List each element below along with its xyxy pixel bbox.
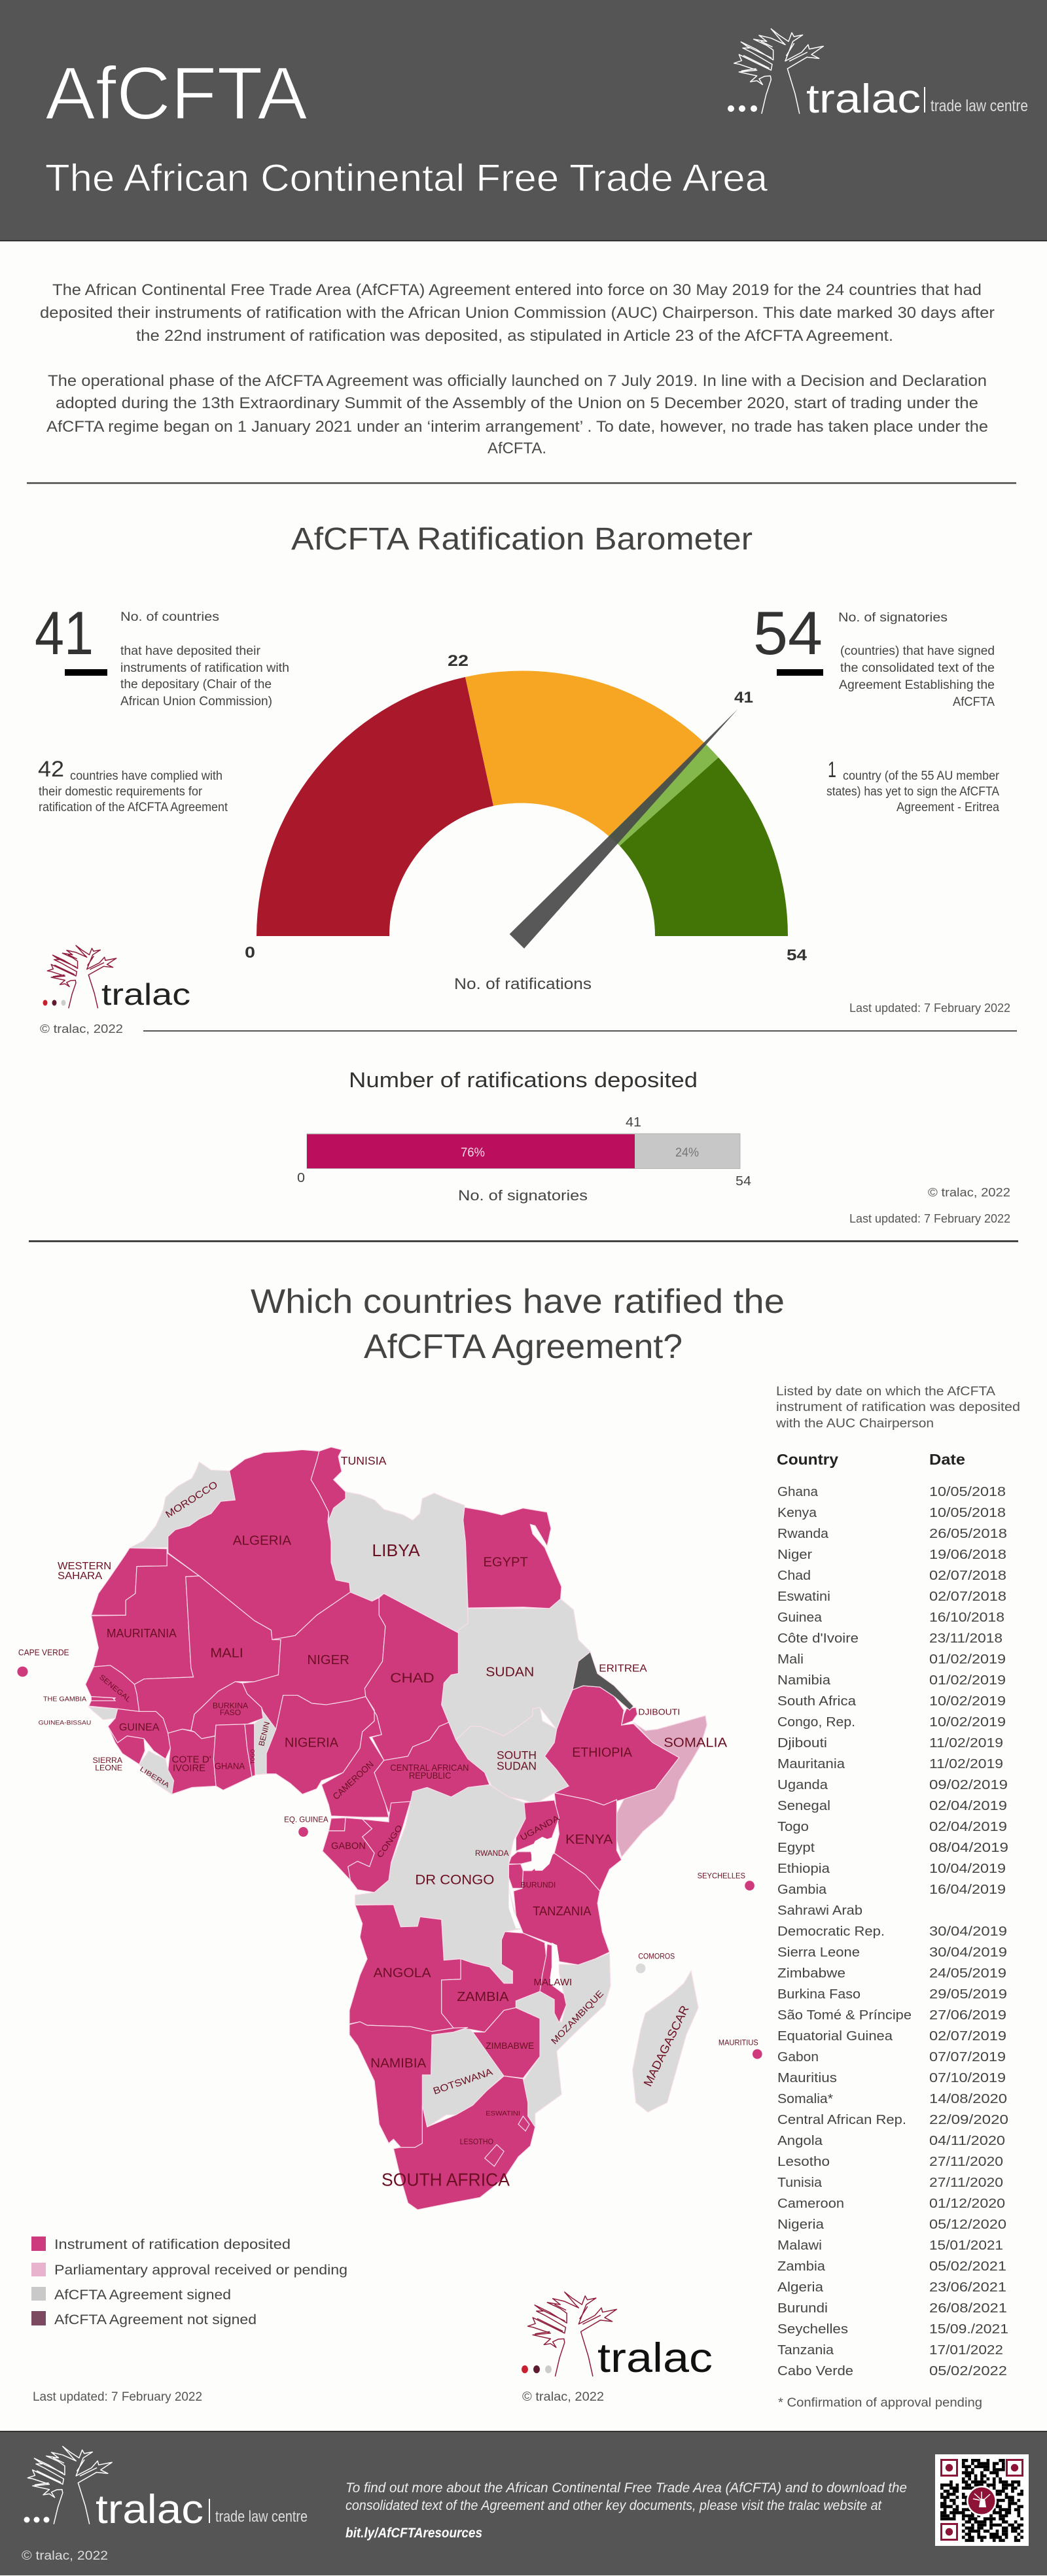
ratification table: 27/11/2020 [929,2155,1003,2169]
map country labels: LESOTHO [460,2138,493,2146]
map rotated labels: MOROCCO [164,1479,220,1520]
ratification table: Congo, Rep. [777,1715,855,1730]
ratification table: Ghana [777,1485,819,1499]
ratification table: 23/11/2018 [929,1631,1003,1646]
ratification table: 05/12/2020 [929,2218,1006,2232]
ratification table: Sahrawi Arab [777,1904,862,1918]
ratification table: Zambia [777,2259,826,2274]
ratification table: Seychelles [777,2322,848,2337]
gauge needle [510,709,738,949]
logo: tralac header: trade law centre [931,97,1028,115]
map country labels: KENYA [565,1832,613,1847]
map country labels: BURUNDI [521,1881,556,1889]
ratification table: 05/02/2021 [929,2259,1006,2274]
map rotated labels: SENEGAL [98,1673,132,1704]
ratification table: 15/09./2021 [929,2322,1008,2337]
map country labels: LEONE [95,1764,122,1772]
map country labels: GUINEA-BISSAU [39,1719,91,1726]
ratification table: Niger [777,1548,812,1562]
map rotated labels: CAMEROON [330,1759,376,1801]
gauge labels: 22 [448,652,469,670]
map country labels: CHAD [390,1670,435,1686]
ratification table: 26/08/2021 [929,2301,1007,2316]
intro text [40,281,995,457]
ratification table: 22/09/2020 [929,2113,1008,2127]
last updated: barometer: Last updated: 7 February 2022 [849,1001,1010,1015]
heading: barometer: AfCFTA Ratification Barometer [291,522,753,557]
ratification table: 16/10/2018 [929,1610,1004,1625]
table intro note: Listed by date on which the AfCFTA [776,1385,995,1399]
footer band [0,2431,1047,2575]
map country labels: ERITREA [599,1663,647,1674]
ratification table: Uganda [777,1778,828,1792]
countries: parliamentary approval [616,1716,707,1857]
heading: ratifications deposited: Number of ratifications deposited [349,1068,698,1092]
intro text: The operational phase of the AfCFTA Agreement was officially launched on 7 July 2019. In line with a Decision and Declaration [48,372,987,390]
map country labels: COMOROS [638,1952,675,1960]
map country labels: MALAWI [534,1977,572,1987]
ratification table: 14/08/2020 [929,2092,1007,2106]
map country labels: DR CONGO [415,1871,494,1887]
copyright: footer: © tralac, 2022 [22,2549,108,2563]
table header: Date [929,1451,965,1468]
ratification table: 19/06/2018 [929,1548,1006,1562]
map country labels: FASO [220,1708,241,1717]
map country labels: IVOIRE [173,1762,205,1773]
ratification table: 10/05/2018 [929,1485,1006,1499]
stat: 41 countries: No. of countries [120,610,219,624]
ratification table: Togo [777,1820,809,1834]
progress bar: 41 [626,1115,641,1130]
map country labels: SOMALIA [664,1735,727,1750]
table intro note: with the AUC Chairperson [775,1417,934,1431]
ratification table: 07/10/2019 [929,2071,1006,2085]
ratification table: 11/02/2019 [929,1757,1003,1771]
map rotated labels: CONGO [375,1823,404,1860]
intro text: AfCFTA regime began on 1 January 2021 under an ‘interim arrangement’ . To date, however, no trade has taken place under the [46,418,988,436]
map legend: AfCFTA Agreement not signed [54,2312,257,2327]
copyright: map: © tralac, 2022 [522,2390,604,2404]
ratification table: Algeria [777,2280,824,2295]
map rotated labels: BENIN [257,1720,272,1747]
progress bar: 0 [297,1171,305,1185]
ratification table: 02/07/2019 [929,2029,1006,2044]
logo: tralac map [522,2292,713,2381]
map legend [31,2237,347,2327]
ratification table: 10/05/2018 [929,1506,1006,1520]
logo: tralac barometer [43,945,190,1011]
last updated: map: Last updated: 7 February 2022 [33,2390,202,2404]
ratification table: 24/05/2019 [929,1966,1006,1981]
heading: which countries: Which countries have ratified the [251,1283,785,1321]
ratification table: Mauritius [777,2071,837,2085]
map country labels: TANZANIA [533,1904,592,1918]
table header: Country [777,1451,838,1468]
map country labels: CAPE VERDE [18,1648,69,1657]
map country labels: LIBYA [372,1541,420,1559]
stat: 1 country not signed: 1 [828,757,836,782]
map country labels: MAURITIUS [719,2038,758,2047]
stat: 54 signatories: Agreement Establishing the [839,678,995,692]
map country labels [18,1455,758,2190]
ratification table: 09/02/2019 [929,1778,1008,1792]
copyright: bar chart: © tralac, 2022 [928,1186,1010,1199]
ratification table: 29/05/2019 [929,1987,1007,2002]
map country labels: GHANA [215,1762,245,1771]
map legend: Parliamentary approval received or pending [54,2263,347,2278]
ratification table: 10/02/2019 [929,1694,1006,1709]
ratification table: 07/07/2019 [929,2050,1006,2064]
map of Africa [17,1447,762,2210]
ratification table: Cabo Verde [777,2364,853,2378]
ratification table: Ethiopia [777,1862,830,1876]
QR code [935,2454,1029,2546]
ratification table: Gabon [777,2050,819,2064]
ratification table: Equatorial Guinea [777,2029,893,2044]
intro text: adopted during the 13th Extraordinary Summit of the Assembly of the Union on 5 December 2020, start of trading under the [56,394,978,412]
ratification table: Sierra Leone [777,1945,860,1960]
table header [777,1451,965,1468]
ratification table: Gambia [777,1883,827,1897]
map country labels: SOUTH [497,1749,537,1762]
logo: tralac header: tralac [806,77,921,122]
map country labels: CENTRAL AFRICAN [390,1763,469,1773]
map country labels: ESWATINI [486,2110,520,2117]
ratification table: 04/11/2020 [929,2134,1005,2148]
ratification table: 23/06/2021 [929,2280,1006,2295]
map rotated labels: BOTSWANA [432,2066,494,2097]
ratification table: Rwanda [777,1527,829,1541]
ratification table: 05/02/2022 [929,2364,1007,2378]
map country labels: REPUBLIC [409,1771,451,1781]
map country labels: NIGER [307,1652,349,1667]
ratification table: 08/04/2019 [929,1841,1008,1855]
map rotated labels: MOZAMBIQUE [549,1988,605,2046]
ratification table: 17/01/2022 [929,2343,1003,2358]
ratification table: 02/04/2019 [929,1799,1007,1813]
gauge labels: 0 [245,944,255,962]
progress bar: 54 [736,1174,751,1189]
map rotated labels: TOGO [250,1749,256,1764]
footer text: bit.ly/AfCFTAresources [346,2526,482,2541]
footer text: To find out more about the African Continental Free Trade Area (AfCFTA) and to download the [346,2480,907,2496]
ratification table: Guinea [777,1610,823,1625]
stat: 54 signatories: (countries) that have signed [840,644,995,658]
stat: 42 countries complied [38,757,228,814]
logo: tralac header [728,29,1028,122]
footnote: * Confirmation of approval pending [778,2396,982,2410]
ratification table: Democratic Rep. [777,1924,885,1939]
map country labels: ALGERIA [233,1533,291,1548]
ratification table: 15/01/2021 [929,2238,1003,2253]
table intro note: instrument of ratification was deposited [776,1401,1020,1414]
stat: 41 countries: the depositary (Chair of the [120,678,272,691]
progress bar: 24% [675,1146,699,1160]
ratification table: Chad [777,1569,811,1583]
progress bar: No. of signatories [458,1187,588,1204]
ratification table: 10/02/2019 [929,1715,1006,1730]
map legend: Instrument of ratification deposited [54,2237,291,2252]
heading: which countries: AfCFTA Agreement? [364,1328,683,1366]
ratification table: Somalia* [777,2092,833,2106]
map country labels: GABON [331,1840,366,1851]
intro text: AfCFTA. [488,440,546,457]
ratification table: 02/07/2018 [929,1569,1006,1583]
map country labels: ANGOLA [374,1966,431,1981]
stat: 54 signatories: AfCFTA [953,695,995,709]
stat: 1 country not signed [826,757,1000,814]
map rotated labels: UGANDA [518,1813,561,1843]
logo: tralac footer: tralac [96,2487,204,2532]
ratification table: 11/02/2019 [929,1736,1003,1750]
intro text: the 22nd instrument of ratification was deposited, as stipulated in Article 23 of the AfCFTA Agreement. [136,327,893,345]
ratification table: Eswatini [777,1590,830,1604]
ratification table: Central African Rep. [777,2113,906,2127]
countries: AfCFTA signed [89,1462,698,2127]
map country labels: SIERRA [93,1756,123,1765]
copyright: barometer: © tralac, 2022 [40,1022,123,1036]
subtitle: The African Continental Free Trade Area [45,157,768,200]
stat: 41 countries: 41 [35,599,94,667]
map country labels: RWANDA [475,1849,509,1858]
map rotated labels: MADAGASCAR [641,2004,692,2089]
ratification table: Malawi [777,2238,822,2253]
ratification table [777,1451,1008,2378]
ratification table: 02/04/2019 [929,1820,1007,1834]
progress bar [297,1115,751,1204]
ratification table: Cameroon [777,2197,844,2211]
stat: 1 country not signed: country (of the 55 AU member [843,769,1000,783]
gauge labels [245,652,807,964]
ratification table: 10/04/2019 [929,1862,1006,1876]
stat: 41 countries: that have deposited their [120,644,261,658]
ratification table: Zimbabwe [777,1966,845,1981]
ratification table: 26/05/2018 [929,1527,1007,1541]
map country labels: SOUTH AFRICA [382,2170,510,2190]
last updated: bar chart: Last updated: 7 February 2022 [849,1212,1010,1225]
stat: 1 country not signed: Agreement - Eritrea [896,801,999,814]
ratification table: 30/04/2019 [929,1945,1007,1960]
stat: 54 signatories: No. of signatories [838,611,948,625]
map country labels: MALI [210,1646,243,1660]
map rotated labels [98,1479,692,2097]
stat: 42 countries complied: ratification of the AfCFTA Agreement [39,801,228,814]
map country labels: SUDAN [497,1760,537,1773]
map country labels: NAMIBIA [370,2055,426,2070]
intro text: deposited their instruments of ratification with the African Union Commission (AUC) Chairperson. This date marked 30 days after [40,304,995,322]
map country labels: ETHIOPIA [572,1745,632,1760]
map country labels: SEYCHELLES [698,1871,745,1880]
ratification table: Namibia [777,1673,831,1688]
countries: ratified [17,1447,762,2210]
ratification table: Nigeria [777,2218,825,2232]
gauge chart: No. of ratifications [454,975,592,993]
map country labels: THE GAMBIA [43,1696,86,1703]
ratification table: 27/11/2020 [929,2176,1003,2190]
ratification table: Burkina Faso [777,1987,861,2002]
ratification table: Kenya [777,1506,817,1520]
map country labels: SAHARA [58,1570,103,1582]
ratification table: Mauritania [777,1757,845,1771]
gauge labels: 41 [734,689,753,706]
ratification table: Senegal [777,1799,830,1813]
gauge labels: 54 [787,947,807,964]
map country labels: SUDAN [486,1664,534,1679]
map country labels: MAURITANIA [107,1627,177,1640]
stat: 54 signatories: the consolidated text of the [840,661,995,675]
header band [0,0,1047,241]
title: AfCFTA [45,52,308,135]
map country labels: NIGERIA [285,1735,338,1750]
ratification table: 01/02/2019 [929,1652,1006,1667]
logo: tralac map: tralac [597,2335,713,2381]
map country labels: GUINEA [119,1722,160,1733]
map country labels: EGYPT [484,1555,528,1569]
map country labels: BURKINA [213,1701,249,1710]
footer text: consolidated text of the Agreement and other key documents, please visit the tralac website at [346,2498,882,2513]
ratification table: 27/06/2019 [929,2008,1006,2023]
ratification table: Djibouti [777,1736,827,1750]
stat: 42 countries complied: countries have complied with [70,769,222,783]
ratification table: Mali [777,1652,804,1667]
ratification table: 02/07/2018 [929,1590,1006,1604]
ratification table: Côte d'Ivoire [777,1631,859,1646]
ratification table: Egypt [777,1841,815,1855]
footer text [346,2480,907,2541]
map country labels: DJIBOUTI [638,1707,680,1717]
ratification table: Lesotho [777,2155,830,2169]
map country labels: WESTERN [58,1560,111,1571]
intro text: The African Continental Free Trade Area (AfCFTA) Agreement entered into force on 30 May 2019 for the 24 countries that had [52,281,982,299]
map country labels: EQ. GUINEA [284,1815,328,1824]
stat: 1 country not signed: states) has yet to sign the AfCFTA [826,785,999,799]
lakes [508,1837,564,1993]
heading: which countries [251,1283,785,1366]
map country labels: COTE D' [172,1754,211,1765]
ratification table: Angola [777,2134,823,2148]
table intro note [775,1385,1020,1431]
stat: 41 countries: African Union Commission) [120,695,272,708]
ratification table: Tanzania [777,2343,834,2358]
ratification table: Burundi [777,2301,828,2316]
stat: 41 countries [35,599,289,708]
progress bar: 76% [461,1146,485,1160]
logo: tralac footer [24,2446,308,2532]
map country labels: ZIMBABWE [486,2041,534,2051]
map country labels: ZAMBIA [457,1989,509,2004]
logo: tralac barometer: tralac [101,977,190,1011]
gauge chart [245,652,807,993]
stat: 41 countries: instruments of ratification with [120,661,289,675]
ratification table: South Africa [777,1694,857,1709]
map rotated labels: LIBERIA [138,1766,171,1790]
map country labels: TUNISIA [341,1455,387,1467]
stat: 42 countries complied: their domestic requirements for [39,785,203,799]
country not signed: Eritrea [573,1652,633,1710]
logo: tralac footer: trade law centre [215,2508,308,2526]
map legend: AfCFTA Agreement signed [54,2288,231,2303]
stat: 54 signatories: 54 [753,599,823,667]
ratification table: 16/04/2019 [929,1883,1006,1897]
ratification table: 01/02/2019 [929,1673,1006,1688]
stat: 54 signatories [753,599,995,709]
ratification table: São Tomé & Príncipe [777,2008,912,2023]
ratification table: Tunisia [777,2176,823,2190]
ratification table: 30/04/2019 [929,1924,1007,1939]
stat: 42 countries complied: 42 [38,757,64,782]
ratification table: 01/12/2020 [929,2197,1005,2211]
